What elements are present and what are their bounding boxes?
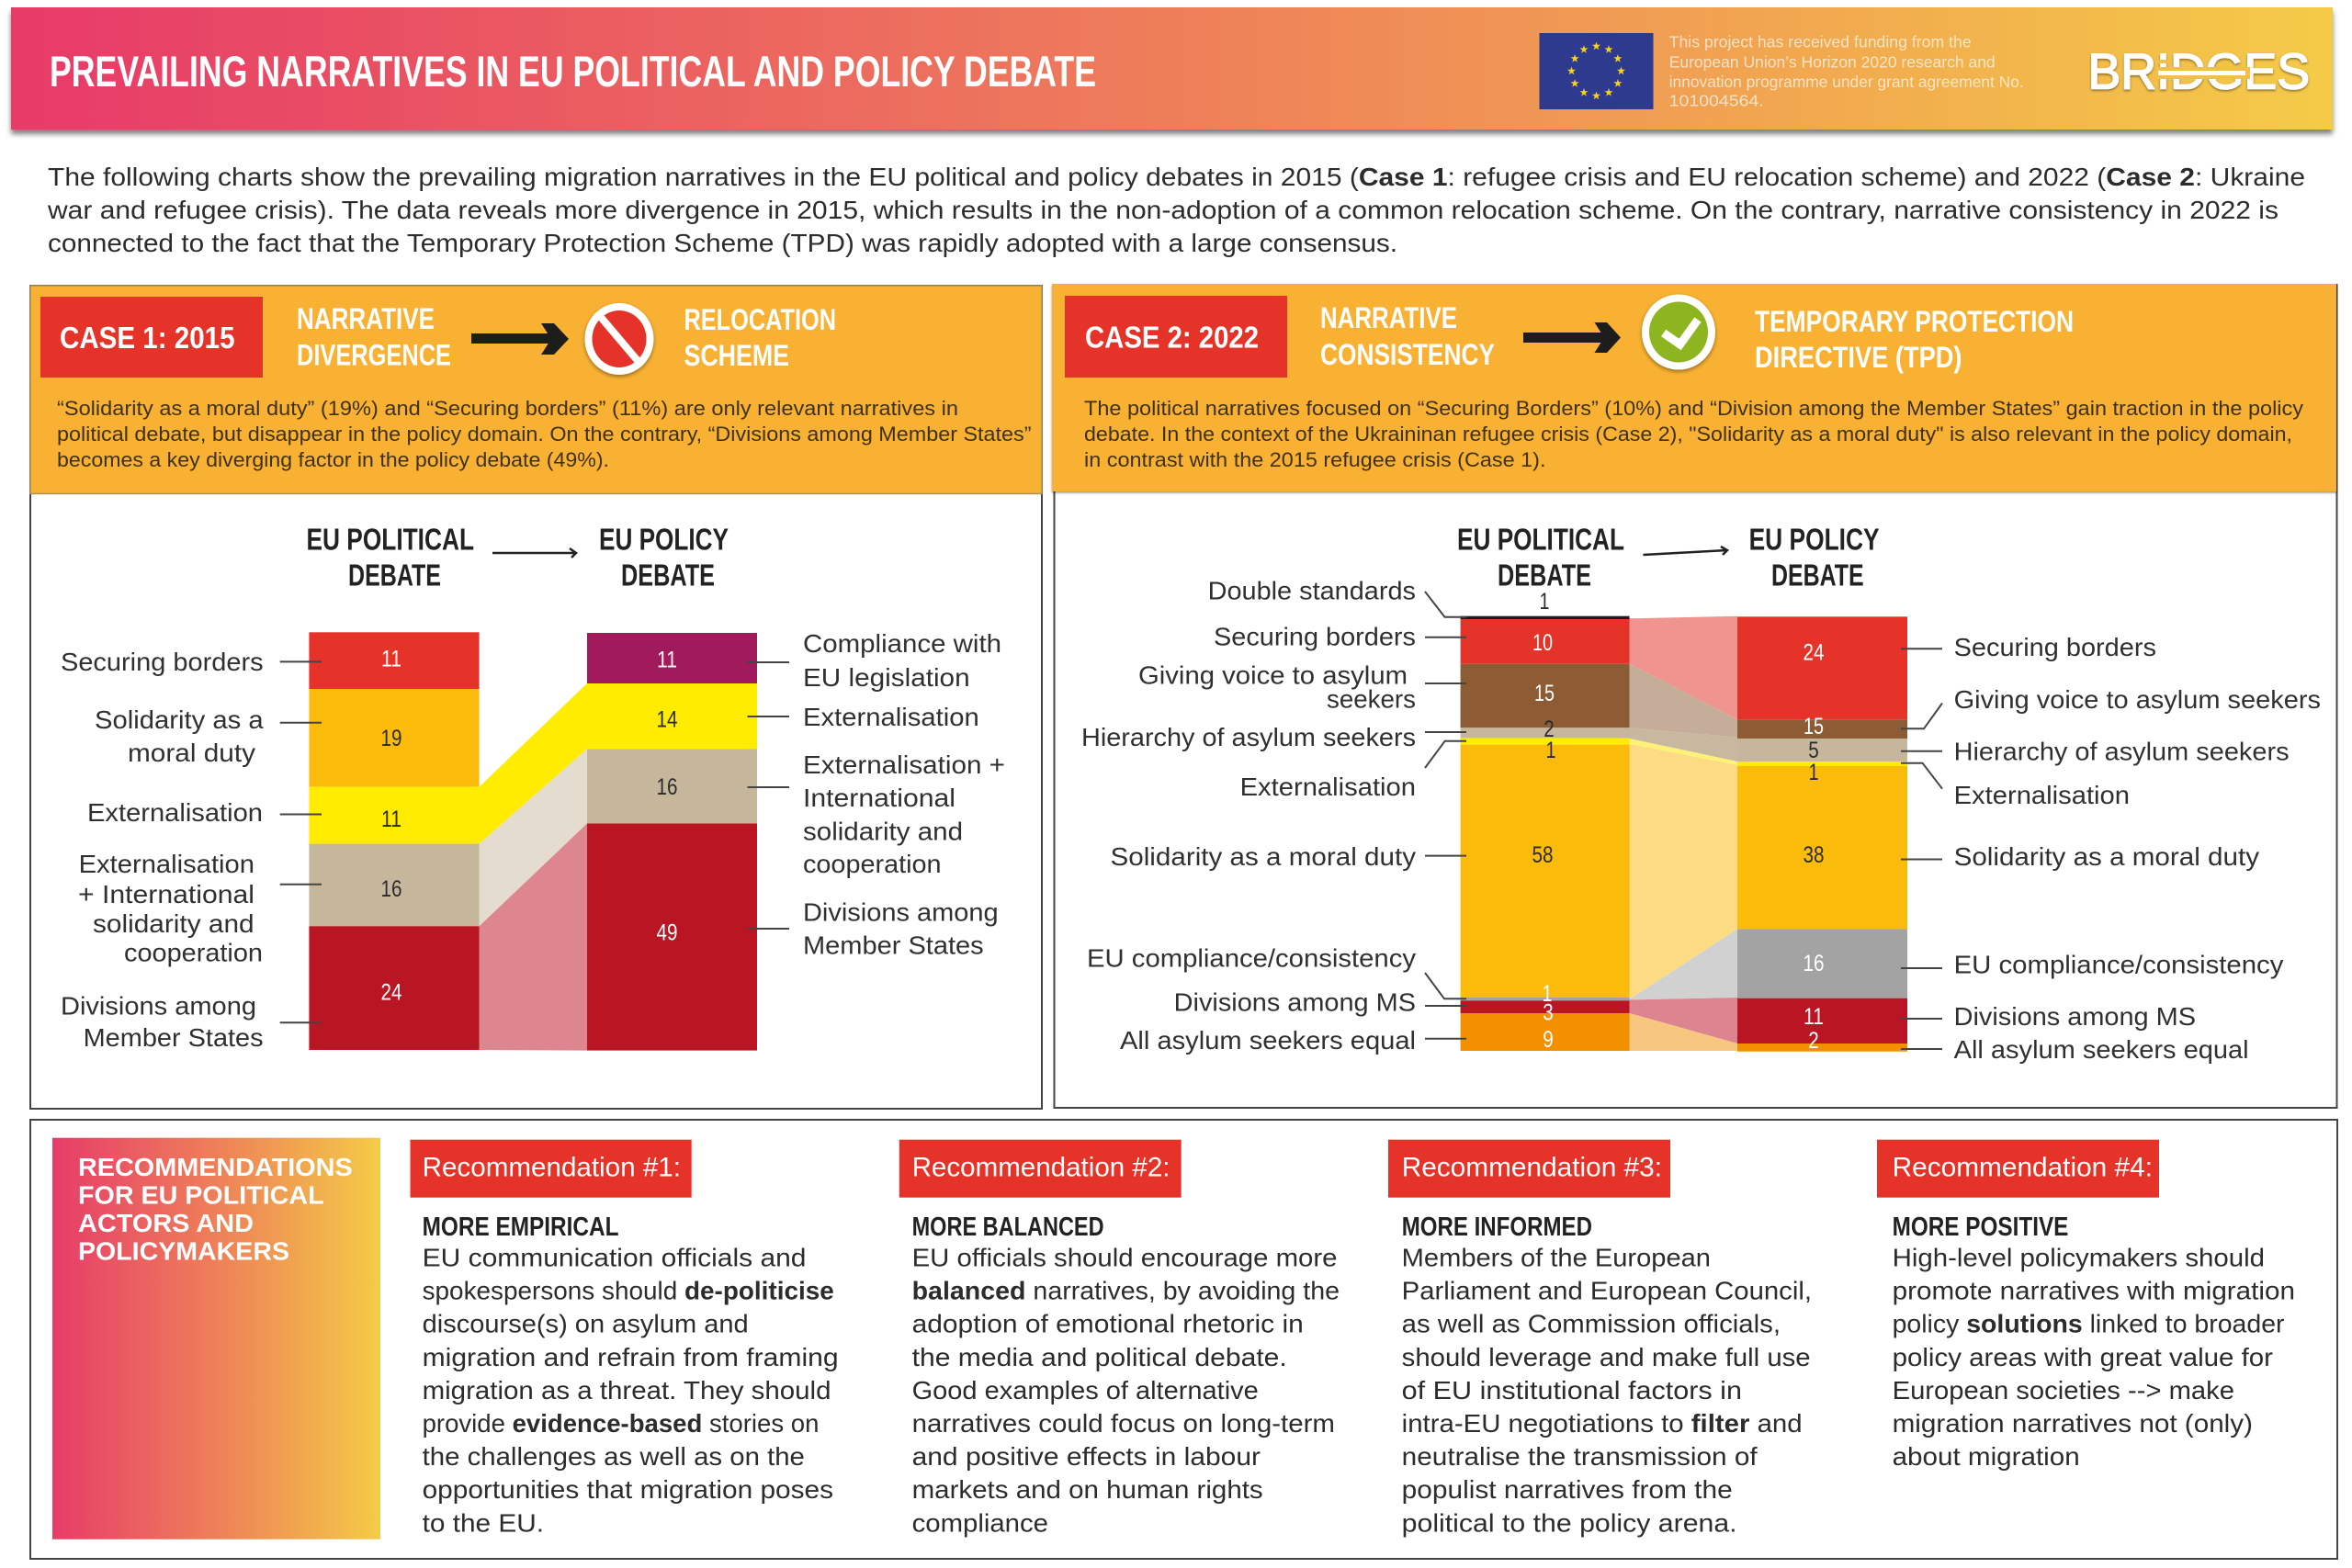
labels right: cooperation xyxy=(803,850,942,878)
recommendation 2 body xyxy=(912,1244,1340,1537)
labels left: + International xyxy=(78,880,254,908)
labels left: cooperation xyxy=(124,939,263,966)
labels left: seekers xyxy=(1327,685,1416,714)
labels right: International xyxy=(803,784,956,812)
temporary protection directive heading: TEMPORARY PROTECTION xyxy=(1755,305,2074,338)
recommendation 4 body: about migration xyxy=(1893,1442,2080,1471)
labels right: Giving voice to asylum seekers xyxy=(1954,685,2321,714)
funding statement: innovation programme under grant agreement No. xyxy=(1669,73,2024,91)
recommendation 3 body: political to the policy arena. xyxy=(1402,1508,1737,1537)
stacked bar: EU policy debate: 24 xyxy=(1803,640,1825,666)
icon: EU flag xyxy=(1540,33,1654,109)
recommendations title block: RECOMMENDATIONS xyxy=(78,1153,353,1181)
case 2 badge xyxy=(1065,296,1287,378)
recommendation 1 body xyxy=(423,1244,839,1537)
relocation scheme heading: SCHEME xyxy=(684,339,789,372)
stacked bar: EU political debate: 2 xyxy=(1544,716,1555,742)
chart headings xyxy=(307,522,729,592)
recommendation 2 body: adoption of emotional rhetoric in xyxy=(912,1310,1304,1338)
stacked bar: EU political debate: 19 xyxy=(380,726,402,751)
recommendation 4 body: European societies --> make xyxy=(1893,1376,2234,1404)
recommendation 2 body: compliance xyxy=(912,1508,1048,1537)
funding statement: 101004564. xyxy=(1669,92,1764,110)
stacked bar: EU policy debate: 38 xyxy=(1803,842,1825,868)
stacked bar: EU policy debate: 1 xyxy=(1808,760,1819,785)
recommendation 3 body: intra-EU negotiations to filter and xyxy=(1402,1409,1803,1438)
case 1 header band xyxy=(30,286,1042,494)
stacked bar: EU policy debate xyxy=(587,633,757,1051)
stacked bar: EU political debate: 24 xyxy=(380,979,402,1005)
labels left: Securing borders xyxy=(1214,623,1416,651)
recommendation 1 xyxy=(410,1140,839,1537)
recommendation 3 body: of EU institutional factors in xyxy=(1402,1376,1742,1404)
recommendation 1 body: EU communication officials and xyxy=(423,1244,807,1271)
stacked bar: EU policy debate: 11 xyxy=(657,647,677,672)
recommendation 1 body: to the EU. xyxy=(423,1508,544,1537)
intro text: The following charts show the prevailing migration narratives in the EU political and policy debates in 2015 ( Case 1: refugee crisis and EU relocation scheme) and 2022 ( Case 2: Ukraine xyxy=(48,163,2305,191)
labels left: Double standards xyxy=(1208,577,1416,605)
stacked bar: EU political debate: 1 xyxy=(1545,738,1556,763)
flow chart: case 1 xyxy=(61,629,1005,1052)
recommendation 3 badge: Recommendation #3: xyxy=(1402,1153,1662,1183)
stacked bar: EU political debate: 15 xyxy=(1534,681,1555,706)
recommendation 4 body: promote narratives with migration xyxy=(1893,1277,2295,1305)
recommendation 3 badge xyxy=(1388,1140,1670,1198)
labels left: Externalisation xyxy=(1240,773,1416,801)
labels right: Hierarchy of asylum seekers xyxy=(1954,737,2290,766)
stacked bar: EU political debate xyxy=(309,632,480,1050)
stacked bar: EU policy debate: 11 xyxy=(1804,1004,1824,1030)
narrative consistency heading: NARRATIVE xyxy=(1320,301,1457,334)
stacked bar: EU political debate: 16 xyxy=(380,876,402,902)
recommendation 1 body: spokespersons should de-politicise xyxy=(423,1277,834,1305)
case 2 summary: debate. In the context of the Ukraininan refugee crisis (Case 2), "Solidarity as a moral duty" is also relevant in the policy domain, xyxy=(1084,423,2292,446)
recommendation 2 body: the media and political debate. xyxy=(912,1343,1287,1371)
recommendation 2 body: and positive effects in labour xyxy=(912,1442,1261,1471)
case 1 badge: CASE 1: 2015 xyxy=(60,321,235,355)
recommendation 1 badge: Recommendation #1: xyxy=(423,1153,681,1183)
labels right: solidarity and xyxy=(803,818,963,846)
funding statement: European Union’s Horizon 2020 research and xyxy=(1669,52,1996,71)
leader lines xyxy=(1425,592,1942,1049)
recommendation 4 body xyxy=(1893,1244,2295,1471)
recommendation 2 body: markets and on human rights xyxy=(912,1475,1263,1504)
logo: Bridges: BRIDGES xyxy=(2087,42,2310,99)
recommendation 2 body: balanced narratives, by avoiding the xyxy=(912,1277,1340,1305)
recommendation 3 body: as well as Commission officials, xyxy=(1402,1310,1781,1338)
labels right: Externalisation + xyxy=(803,750,1005,779)
labels right xyxy=(803,629,1005,960)
flow connectors xyxy=(480,683,587,1051)
panel: case 1 xyxy=(30,286,1042,1109)
recommendation 1 body: migration as a threat. They should xyxy=(423,1376,831,1404)
narrative divergence heading xyxy=(297,302,451,371)
temporary protection directive heading xyxy=(1755,305,2074,374)
chart headings: DEBATE xyxy=(1498,558,1591,592)
narrative divergence heading: DIVERGENCE xyxy=(297,338,451,371)
temporary protection directive heading: DIRECTIVE (TPD) xyxy=(1755,341,1962,374)
case 1 summary xyxy=(57,397,1031,471)
stacked bar: EU political debate: 10 xyxy=(1532,630,1553,656)
recommendation 3 body: Members of the European xyxy=(1402,1244,1711,1271)
stacked bar: EU political debate xyxy=(1461,589,1630,1053)
stacked bar: EU policy debate: 15 xyxy=(1804,714,1824,739)
panel: recommendations xyxy=(30,1120,2337,1559)
labels right: Solidarity as a moral duty xyxy=(1954,842,2259,871)
relocation scheme heading: RELOCATION xyxy=(684,303,836,336)
recommendation 4 badge: Recommendation #4: xyxy=(1893,1153,2153,1183)
header banner xyxy=(11,7,2333,130)
recommendations title block xyxy=(52,1138,380,1540)
recommendation 1 body: discourse(s) on asylum and xyxy=(423,1310,749,1338)
case 1 summary: political debate, but disappear in the policy domain. On the contrary, “Divisions among Member States” xyxy=(57,423,1031,446)
stacked bar: EU political debate: 1 xyxy=(1542,981,1553,1007)
stacked bar: EU political debate: 11 xyxy=(381,807,401,832)
chart headings: DEBATE xyxy=(1771,558,1864,592)
recommendation 3 body: neutralise the transmission of xyxy=(1402,1442,1758,1471)
recommendation 2 badge: Recommendation #2: xyxy=(912,1153,1170,1183)
chart headings: EU POLICY xyxy=(1749,522,1880,557)
labels left: Hierarchy of asylum seekers xyxy=(1081,723,1416,751)
stacked bar: EU policy debate: 5 xyxy=(1808,738,1819,763)
recommendation 2 body: EU officials should encourage more xyxy=(912,1244,1338,1271)
labels right: Divisions among MS xyxy=(1954,1002,2196,1031)
case 2 summary: in contrast with the 2015 refugee crisis (Case 1). xyxy=(1084,448,1545,471)
recommendation 3 body: should leverage and make full use xyxy=(1402,1343,1811,1371)
stacked bar: EU policy debate xyxy=(1737,616,1907,1054)
icon: check mark xyxy=(1642,294,1715,369)
recommendation 1 heading: MORE EMPIRICAL xyxy=(423,1213,619,1242)
narrative divergence heading: NARRATIVE xyxy=(297,302,435,335)
labels left: Securing borders xyxy=(61,648,264,676)
recommendation 2 heading: MORE BALANCED xyxy=(912,1213,1104,1242)
labels right: Compliance with xyxy=(803,629,1001,658)
funding statement: This project has received funding from the xyxy=(1669,33,1972,51)
recommendation 1 body: the challenges as well as on the xyxy=(423,1442,805,1471)
recommendation 4 body: High-level policymakers should xyxy=(1893,1244,2265,1271)
intro text: connected to the fact that the Temporary Protection Scheme (TPD) was rapidly adopted with a large consensus. xyxy=(48,229,1397,257)
leader lines xyxy=(280,661,789,1022)
labels left: Divisions among xyxy=(61,992,256,1021)
labels right: EU compliance/consistency xyxy=(1954,950,2283,979)
intro text: war and refugee crisis). The data reveals more divergence in 2015, which results in the non-adoption of a common relocation scheme. On the contrary, narrative consistency in 2022 is xyxy=(47,196,2278,224)
case 1 summary: “Solidarity as a moral duty” (19%) and “Securing borders” (11%) are only relevant narratives in xyxy=(57,397,958,420)
labels left: Externalisation xyxy=(79,850,254,878)
case 1 summary: becomes a key diverging factor in the policy debate (49%). xyxy=(57,448,609,471)
recommendation 4 body: policy areas with great value for xyxy=(1893,1343,2273,1371)
recommendation 4 xyxy=(1877,1140,2295,1471)
stacked bar: EU political debate: 9 xyxy=(1543,1027,1554,1053)
labels left: Solidarity as a xyxy=(95,705,264,734)
arrow xyxy=(1523,322,1621,353)
title: PREVAILING NARRATIVES IN EU POLITICAL AND POLICY DEBATE xyxy=(50,47,1096,96)
labels right: Externalisation xyxy=(803,703,979,731)
funding statement xyxy=(1669,33,2024,110)
stacked bar: EU policy debate: 16 xyxy=(656,774,678,800)
recommendation 1 body: opportunities that migration poses xyxy=(423,1475,833,1504)
labels right: Member States xyxy=(803,931,984,960)
flow connectors xyxy=(1630,616,1737,1051)
recommendation 1 body: provide evidence-based stories on xyxy=(423,1409,819,1438)
labels left: Member States xyxy=(84,1023,264,1052)
recommendation 4 badge xyxy=(1877,1140,2159,1198)
stacked bar: EU policy debate: 2 xyxy=(1808,1028,1819,1054)
labels left: Externalisation xyxy=(87,798,263,827)
stacked bar: EU policy debate: 16 xyxy=(1803,951,1825,976)
chart headings: DEBATE xyxy=(348,558,441,592)
chart headings: EU POLICY xyxy=(599,522,729,557)
recommendation 3 body: Parliament and European Council, xyxy=(1402,1277,1812,1305)
labels left: Solidarity as a moral duty xyxy=(1110,842,1416,871)
case 1 badge xyxy=(40,297,263,378)
stacked bar: EU political debate: 11 xyxy=(381,647,401,672)
chart headings: DEBATE xyxy=(621,558,715,592)
recommendation 3 body: populist narratives from the xyxy=(1402,1475,1733,1504)
recommendation 3 body xyxy=(1402,1244,1812,1537)
recommendation 1 badge xyxy=(410,1140,692,1198)
chart headings: EU POLITICAL xyxy=(307,522,474,557)
stacked bar: EU political debate: 1 xyxy=(1540,589,1549,615)
stacked bar: EU political debate: 58 xyxy=(1532,842,1553,868)
labels right: Securing borders xyxy=(1954,633,2156,661)
chart headings: EU POLITICAL xyxy=(1457,522,1624,557)
recommendation 3 heading: MORE INFORMED xyxy=(1402,1213,1592,1242)
intro text xyxy=(47,163,2305,257)
labels right: All asylum seekers equal xyxy=(1954,1035,2249,1064)
labels left: All asylum seekers equal xyxy=(1120,1026,1416,1055)
panel: case 2 xyxy=(1052,284,2337,1108)
chart headings xyxy=(1457,522,1880,592)
recommendations title block: ACTORS AND xyxy=(78,1209,254,1237)
stacked bar: EU political debate: 3 xyxy=(1543,1000,1554,1026)
narrative consistency heading xyxy=(1320,301,1495,371)
recommendation 4 body: migration narratives not (only) xyxy=(1893,1409,2253,1438)
case 2 summary xyxy=(1084,397,2303,471)
labels left: solidarity and xyxy=(93,909,254,938)
recommendations title block: FOR EU POLITICAL xyxy=(78,1181,324,1210)
recommendation 2 body: narratives could focus on long-term xyxy=(912,1409,1335,1438)
recommendation 3 xyxy=(1388,1140,1812,1537)
labels left: Divisions among MS xyxy=(1174,988,1416,1017)
labels left: moral duty xyxy=(128,739,255,767)
stacked bar: EU policy debate: 49 xyxy=(656,920,678,946)
recommendation 1 body: migration and refrain from framing xyxy=(423,1343,839,1371)
relocation scheme heading xyxy=(684,303,836,372)
labels left: Giving voice to asylum xyxy=(1138,661,1408,690)
recommendation 4 heading: MORE POSITIVE xyxy=(1893,1213,2068,1242)
recommendation 2 body: Good examples of alternative xyxy=(912,1376,1259,1404)
labels right: Divisions among xyxy=(803,898,999,927)
flow chart: case 2 xyxy=(1081,577,2321,1064)
narrative consistency heading: CONSISTENCY xyxy=(1320,338,1495,371)
labels right xyxy=(1954,633,2321,1064)
labels left xyxy=(1081,577,1416,1055)
case 2 header band xyxy=(1052,284,2336,491)
icon: prohibition sign xyxy=(584,303,654,375)
labels right: EU legislation xyxy=(803,663,970,692)
recommendation 4 body: policy solutions linked to broader xyxy=(1893,1310,2284,1338)
case 2 badge: CASE 2: 2022 xyxy=(1085,320,1259,355)
labels left: EU compliance/consistency xyxy=(1087,944,1416,973)
labels right: Externalisation xyxy=(1954,781,2130,809)
stacked bar: EU policy debate: 14 xyxy=(656,707,678,733)
case 2 summary: The political narratives focused on “Securing Borders” (10%) and “Division among the Member States” gain traction in the policy xyxy=(1084,397,2303,420)
recommendations title block: POLICYMAKERS xyxy=(78,1237,289,1266)
labels left xyxy=(61,648,264,1052)
recommendation 2 badge xyxy=(899,1140,1182,1198)
arrow xyxy=(471,323,569,355)
recommendation 2 xyxy=(899,1140,1340,1537)
